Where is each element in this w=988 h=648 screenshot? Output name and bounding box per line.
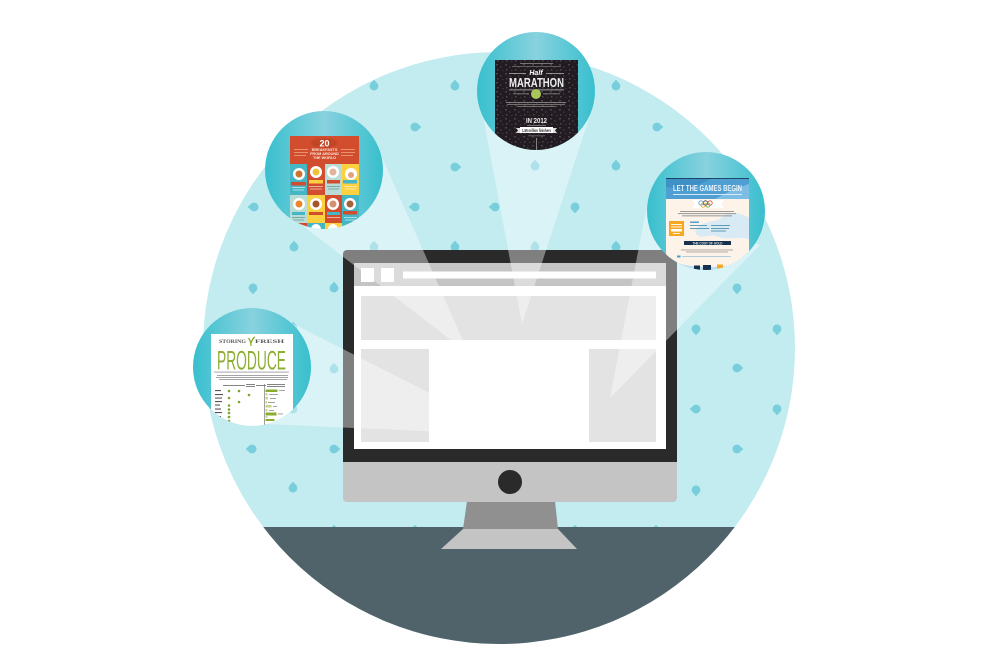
monitor bezel [343, 250, 677, 462]
camera button [498, 470, 522, 494]
browser button 2 [381, 268, 394, 282]
poster body [666, 199, 749, 267]
thumbnail: breakfasts infographic [265, 111, 383, 234]
thumbnail: storing fresh produce infographic: STORING [219, 339, 247, 345]
thumbnail: olympics infographic [647, 152, 765, 273]
right sidebar placeholder [589, 349, 656, 442]
browser button 1 [361, 268, 374, 282]
monitor chin [343, 460, 677, 502]
table header [223, 384, 285, 425]
thumbnail: breakfasts infographic: THE WORLD [313, 156, 336, 160]
left sidebar placeholder [361, 349, 429, 442]
ribbon with rings [692, 200, 724, 208]
storage bars [266, 390, 278, 421]
beam: produce [265, 312, 512, 435]
beam: marathon [480, 100, 595, 324]
thumbnail: half marathon infographic: MARATHON [509, 75, 564, 90]
world map [695, 213, 749, 239]
address bar [403, 272, 656, 278]
page banner placeholder [361, 296, 656, 340]
thumbnail: storing fresh produce infographic: PRODUCE [217, 346, 286, 376]
thumbnail: olympics infographic: LET THE GAMES BEGIN [673, 183, 742, 193]
sponsor logos [694, 266, 700, 270]
monitor stand [463, 501, 558, 529]
thumbnail: breakfasts infographic: 20 [319, 138, 330, 148]
thumbnail: storing fresh produce infographic: FRESH [255, 339, 285, 345]
monitor base [441, 529, 577, 549]
background circle with droplet pattern [203, 52, 795, 644]
thumbnail: half marathon infographic [477, 32, 595, 155]
beam: breakfasts [298, 155, 469, 354]
illustration: monitor receiving infographics [193, 32, 795, 644]
thumbnail: storing fresh produce infographic [193, 308, 311, 430]
thumbnail: half marathon infographic: 1.55 million finishers [522, 128, 551, 133]
thumbnail: half marathon infographic: Half [529, 70, 543, 77]
poster header [290, 136, 359, 164]
thumbnail: olympics infographic: THE COST OF GOLD [692, 241, 723, 245]
projection beams [265, 100, 760, 435]
icon: sprout [248, 337, 255, 346]
thumbnail: breakfasts infographic: BREAKFASTS [312, 148, 338, 152]
table rows [215, 390, 223, 417]
food tiles [290, 164, 307, 195]
screen [354, 263, 666, 449]
dark ribbon [684, 241, 731, 245]
computer monitor [343, 250, 677, 549]
thumbnail: half marathon infographic: IN 2012 [526, 116, 547, 125]
browser toolbar [354, 263, 666, 286]
wave footer [680, 264, 727, 270]
beam: olympics [610, 210, 760, 398]
thumbnail: breakfasts infographic: FROM AROUND [310, 152, 339, 156]
desk surface [263, 527, 735, 644]
poster header [666, 178, 749, 199]
orange box [669, 221, 684, 236]
tile labels [291, 182, 306, 186]
